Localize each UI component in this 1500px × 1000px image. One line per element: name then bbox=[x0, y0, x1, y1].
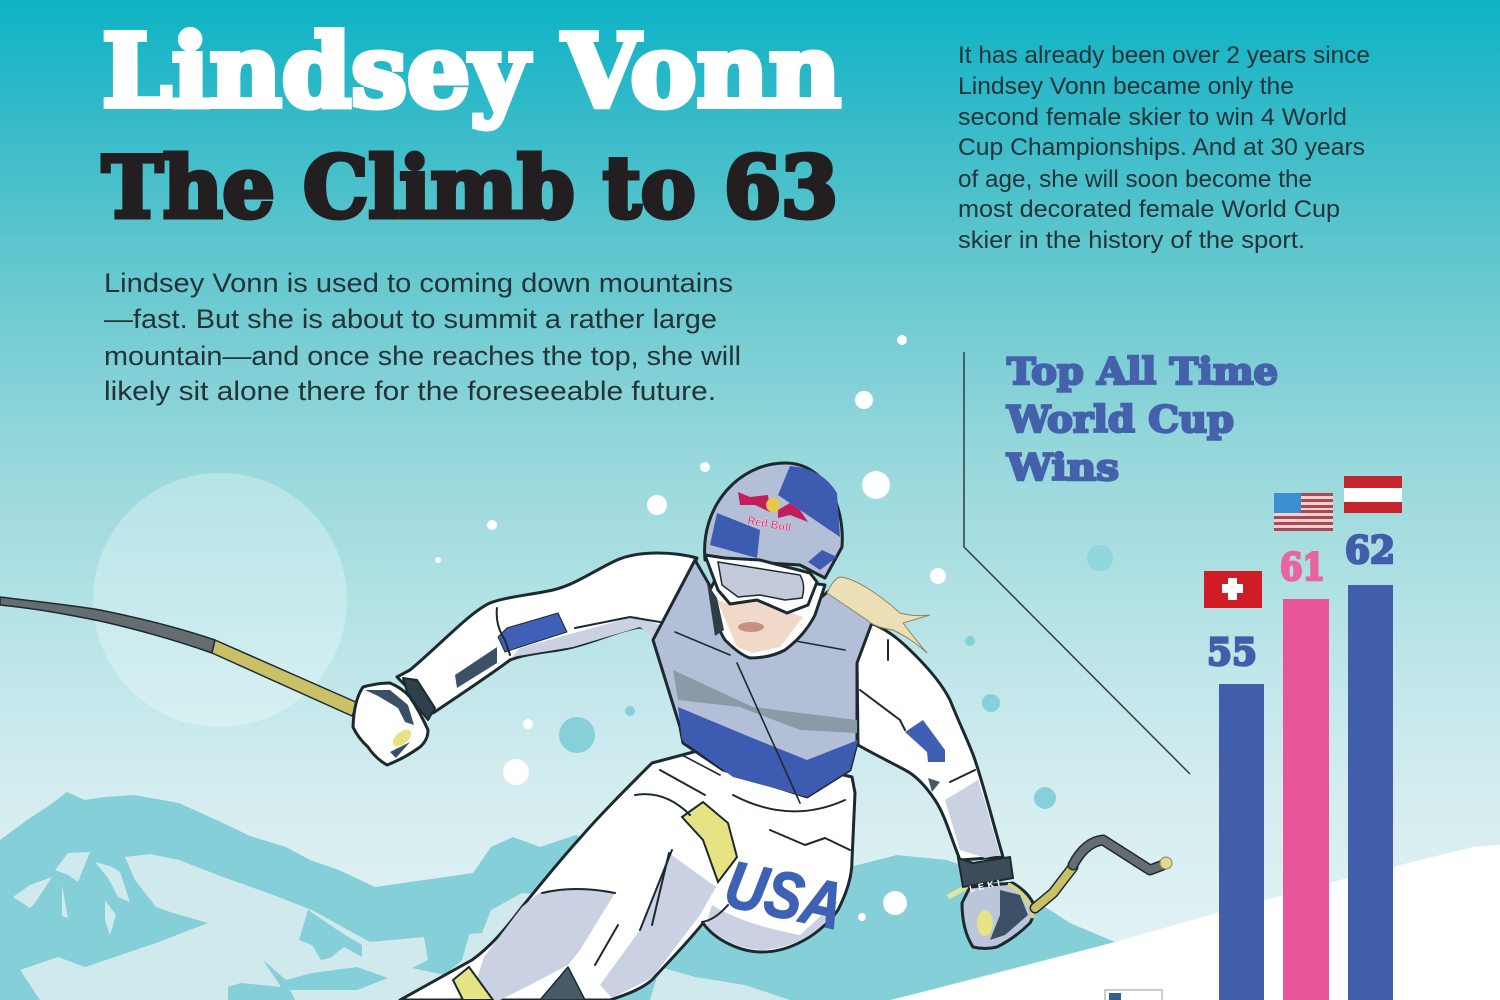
bar: Switzerland 55: 55 bbox=[1207, 630, 1257, 674]
left glove bbox=[353, 678, 435, 765]
chart title: Wins bbox=[1006, 447, 1119, 489]
side text: most decorated female World Cup bbox=[958, 196, 1340, 223]
bar: Switzerland 55 bbox=[1207, 630, 1264, 1000]
Red Bull logo: Red Bull bbox=[746, 513, 792, 535]
side text: Lindsey Vonn became only the bbox=[958, 73, 1294, 100]
intro text: mountain—and once she reaches the top, she will bbox=[104, 341, 741, 371]
helmet checks bbox=[710, 466, 840, 570]
left arm bbox=[397, 553, 697, 713]
head and helmet bbox=[705, 463, 842, 658]
side text: of age, she will soon become the bbox=[958, 166, 1312, 193]
hair bbox=[827, 577, 930, 653]
LEKI strap: LEKI bbox=[968, 878, 1001, 894]
right arm bbox=[857, 623, 1003, 860]
snow bubbles bbox=[435, 335, 1113, 921]
right ski pole bbox=[1035, 840, 1172, 908]
intro text: —fast. But she is about to summit a rather large bbox=[104, 304, 717, 334]
chart title: World Cup bbox=[1006, 399, 1234, 441]
USA lettering: USA bbox=[719, 846, 850, 943]
bar: USA 61 bbox=[1280, 545, 1329, 1000]
flag: Austria bbox=[1344, 476, 1402, 513]
bar: Austria 62 bbox=[1345, 528, 1395, 1000]
snow slope bbox=[840, 845, 1500, 1000]
bar chart bbox=[1207, 528, 1395, 1000]
left ski pole bbox=[0, 597, 358, 716]
badge logo bbox=[1105, 990, 1162, 1000]
intro text bbox=[104, 268, 741, 406]
title: Lindsey Vonn: Lindsey Vonn bbox=[102, 12, 841, 130]
side text: Cup Championships. And at 30 years bbox=[958, 134, 1365, 161]
hood and face bbox=[707, 570, 825, 658]
bar: USA 61: 61 bbox=[1280, 545, 1325, 589]
chart title bbox=[1006, 351, 1278, 489]
bar: Austria 62: 62 bbox=[1345, 528, 1395, 572]
side text: second female skier to win 4 World bbox=[958, 104, 1347, 131]
helmet shell bbox=[705, 463, 842, 578]
mountains bbox=[0, 792, 1115, 1000]
subtitle: The Climb to 63: The Climb to 63 bbox=[102, 138, 838, 237]
flag: USA bbox=[1274, 493, 1333, 531]
skier illustration bbox=[0, 463, 1172, 1000]
right glove bbox=[948, 857, 1034, 948]
flag: Switzerland bbox=[1204, 571, 1262, 608]
pants bbox=[400, 745, 855, 1000]
goggles bbox=[705, 555, 817, 613]
Red Bull logo bbox=[738, 492, 808, 535]
side text bbox=[958, 42, 1370, 254]
chart leader line bbox=[964, 352, 1190, 774]
side text: skier in the history of the sport. bbox=[958, 227, 1305, 254]
side text: It has already been over 2 years since bbox=[958, 42, 1370, 69]
intro text: likely sit alone there for the foreseeable future. bbox=[104, 376, 716, 406]
chart title: Top All Time bbox=[1007, 351, 1278, 393]
moon bbox=[93, 473, 347, 727]
torso vest bbox=[653, 560, 873, 803]
intro text: Lindsey Vonn is used to coming down mountains bbox=[104, 268, 733, 298]
